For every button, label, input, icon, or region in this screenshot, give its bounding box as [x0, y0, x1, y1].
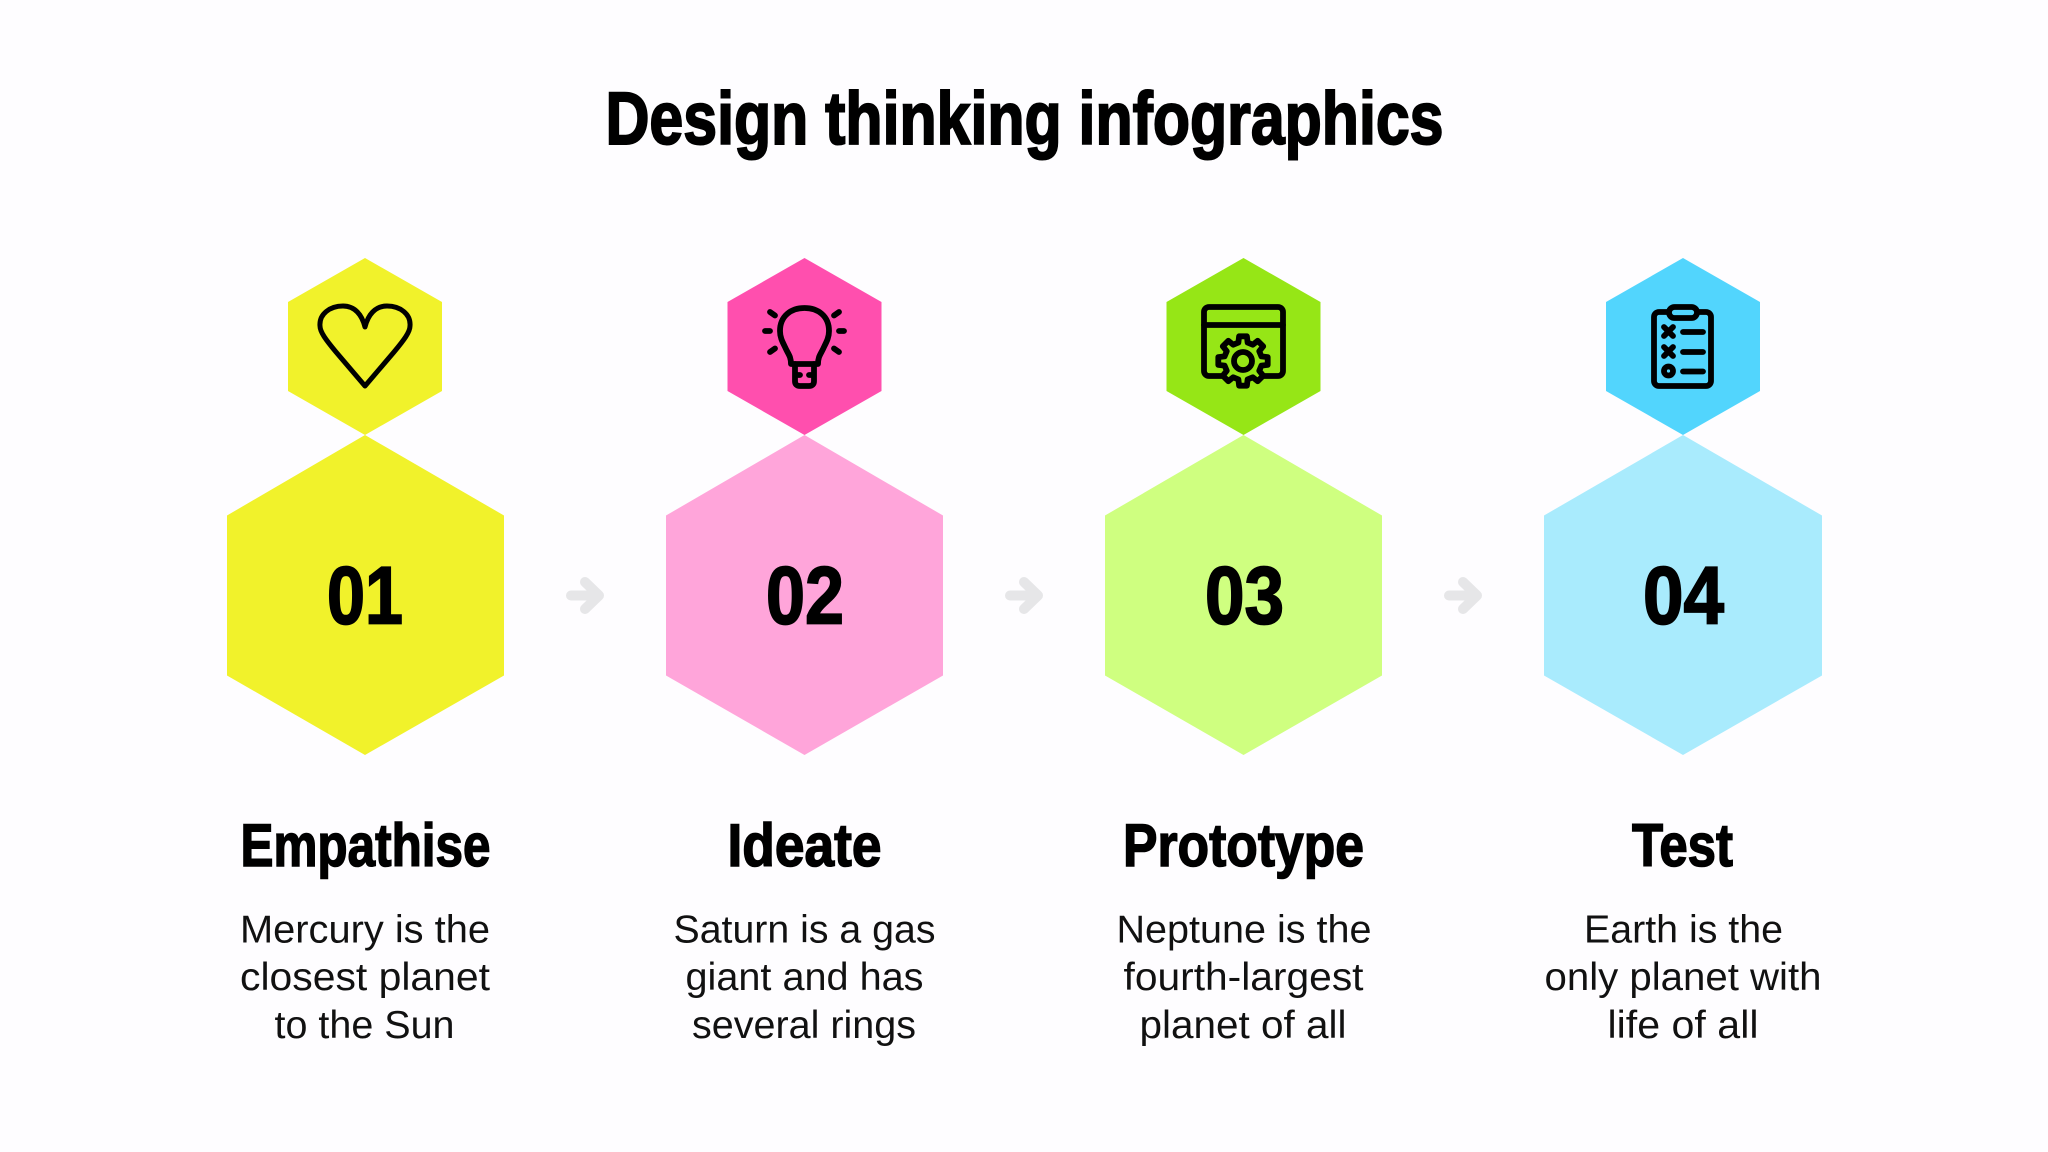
description: Neptune is the	[1116, 908, 1372, 952]
arrow 2	[1010, 582, 1038, 609]
icon: light bulb	[765, 308, 844, 386]
small hexagon: green	[1166, 258, 1320, 435]
description: life of all	[1608, 1004, 1758, 1047]
large hexagon: light pink	[666, 435, 943, 755]
description	[1544, 908, 1822, 1047]
icon: heart	[320, 306, 410, 386]
title: Design thinking infographics	[606, 77, 1444, 160]
description: Earth is the	[1584, 908, 1783, 952]
number 02: 02	[766, 550, 844, 642]
heading: Prototype: Prototype	[1123, 812, 1364, 879]
description	[674, 908, 936, 1047]
description: several rings	[692, 1004, 916, 1047]
number 03: 03	[1205, 550, 1284, 642]
description: closest planet	[240, 956, 490, 999]
description: Saturn is a gas	[674, 908, 936, 952]
small hexagon: pink	[728, 258, 882, 435]
step 2: Ideate	[666, 258, 943, 1047]
step 3: Prototype	[1105, 258, 1382, 1047]
large hexagon: light green	[1105, 435, 1382, 755]
number 04: 04	[1643, 550, 1724, 642]
description: to the Sun	[274, 1004, 454, 1047]
step 1: Empathise	[227, 258, 504, 1047]
icon: clipboard checklist	[1654, 307, 1711, 386]
description	[240, 908, 490, 1047]
arrow 3	[1449, 582, 1477, 609]
small hexagon: blue	[1606, 258, 1760, 435]
description: giant and has	[686, 956, 924, 999]
description	[1116, 908, 1372, 1047]
description: Mercury is the	[240, 908, 490, 952]
arrow 1	[571, 582, 599, 609]
icon: window with gear	[1204, 307, 1283, 386]
large hexagon: yellow	[227, 435, 504, 755]
large hexagon: light blue	[1544, 435, 1822, 755]
step 4: Test	[1544, 258, 1822, 1047]
number 01: 01	[327, 550, 403, 642]
heading: Empathise: Empathise	[240, 812, 490, 879]
description: fourth-largest	[1124, 956, 1364, 999]
heading: Test: Test	[1632, 812, 1733, 879]
description: only planet with	[1544, 956, 1822, 999]
small hexagon: yellow	[288, 258, 442, 435]
heading: Ideate: Ideate	[728, 812, 882, 879]
description: planet of all	[1140, 1004, 1346, 1047]
